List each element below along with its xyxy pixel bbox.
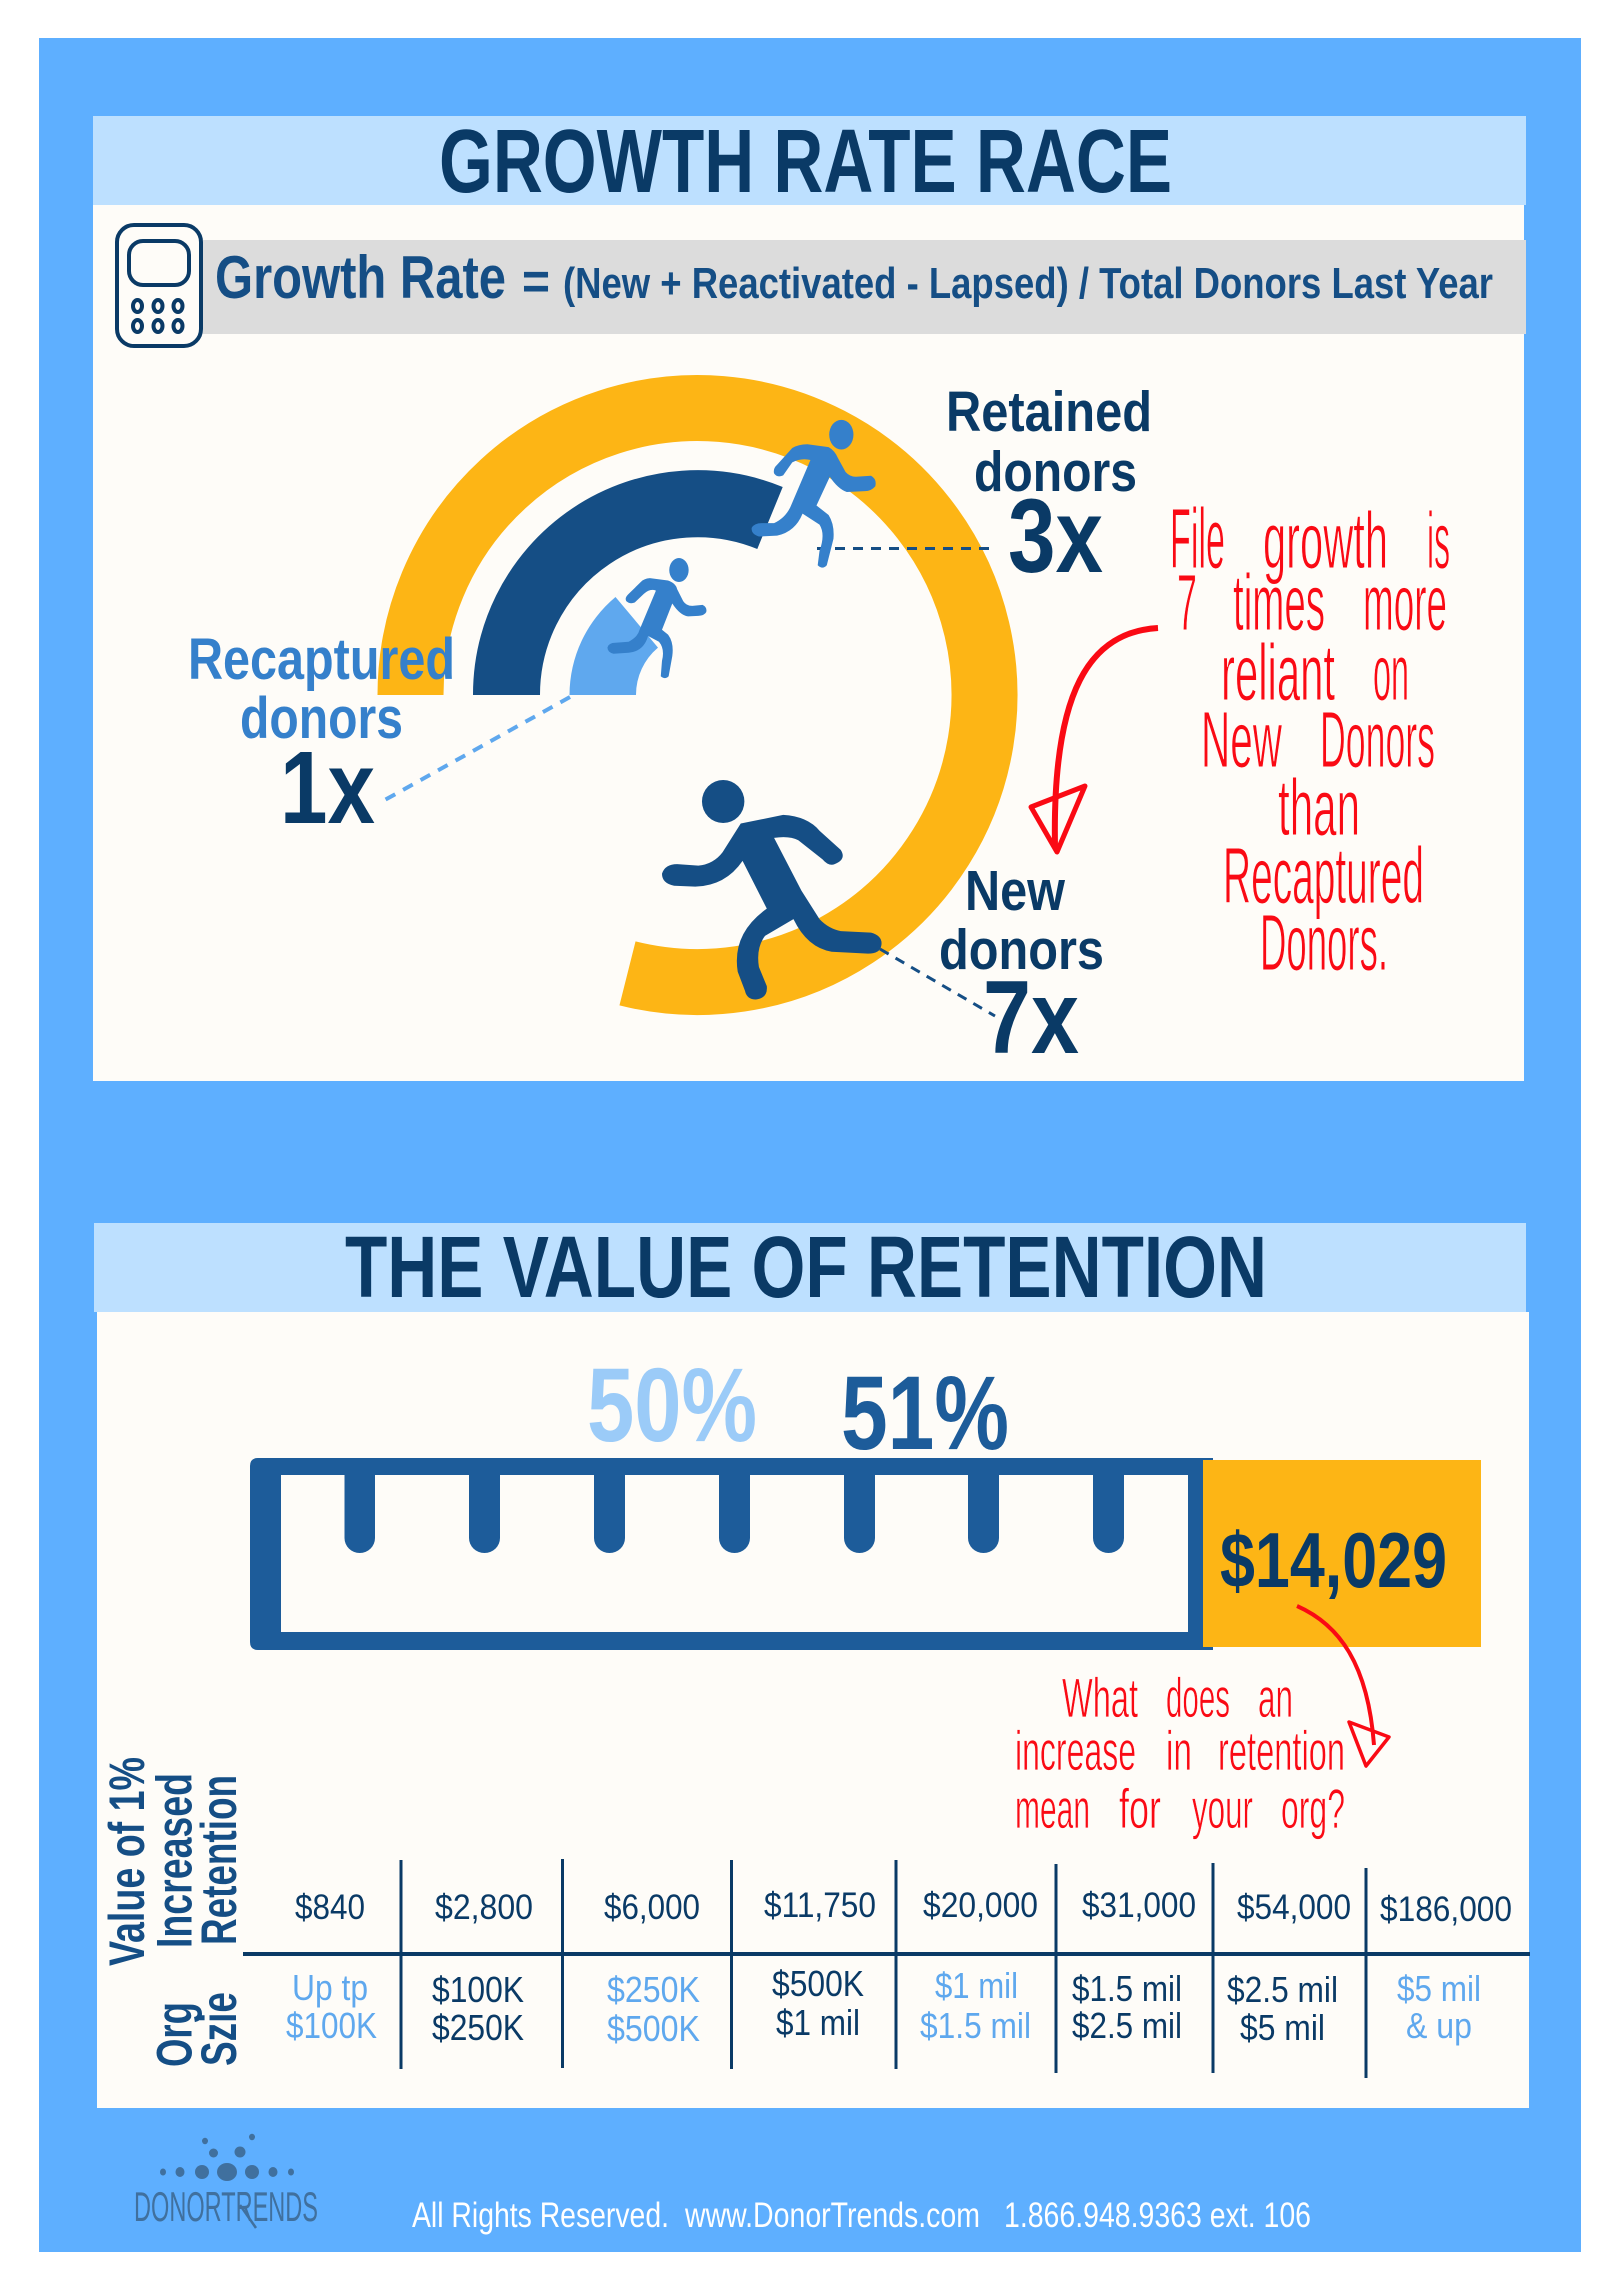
equals sign: = bbox=[522, 253, 550, 311]
table row: org size: Up tp bbox=[292, 1967, 368, 2008]
dashed line: new bbox=[880, 949, 995, 1016]
callout: handwritten note: growth bbox=[1263, 496, 1388, 585]
table row: org size: $1 mil bbox=[776, 2002, 860, 2043]
table row: value of 1 percent bbox=[295, 1886, 1512, 1929]
arrow: red to new donors bbox=[1031, 628, 1158, 852]
callout: handwritten question: retention bbox=[1218, 1719, 1345, 1782]
label: retained donors: donors bbox=[974, 440, 1137, 504]
callout: handwritten question: What bbox=[1062, 1666, 1138, 1729]
table row: value of 1 percent: $186,000 bbox=[1380, 1890, 1512, 1929]
footer text: All Rights Reserved. bbox=[412, 2196, 669, 2235]
panel: growth rate race: is bbox=[1427, 496, 1450, 585]
callout: handwritten question: mean bbox=[1015, 1777, 1090, 1840]
dashed line: retained bbox=[817, 547, 994, 550]
title: GROWTH RATE RACE bbox=[439, 112, 1172, 212]
callout: handwritten note: Donors. bbox=[1260, 898, 1388, 987]
callout: handwritten question: an bbox=[1258, 1666, 1293, 1729]
footer text bbox=[412, 2196, 1311, 2235]
axis label: value of 1% increased retention bbox=[99, 1757, 247, 1966]
chart: ruler gauge bbox=[250, 1458, 1213, 1650]
callout: handwritten question: your bbox=[1192, 1777, 1253, 1840]
footer text: 1.866.948.9363 ext. 106 bbox=[1004, 2196, 1311, 2235]
table row: org size: $500K bbox=[772, 1963, 864, 2004]
table row: org size: $2.5 mil bbox=[1227, 1969, 1338, 2010]
table row: org size: $250K bbox=[607, 1969, 700, 2010]
panel: growth rate race: more bbox=[1363, 558, 1447, 647]
number: value box amount: $14,029 bbox=[1220, 1516, 1447, 1604]
number: 7x: 7x bbox=[983, 960, 1079, 1076]
table row: org size: $5 mil bbox=[1397, 1968, 1481, 2009]
table row: org size: $1.5 mil bbox=[1072, 1968, 1182, 2009]
label: recaptured donors: Recaptured bbox=[188, 627, 455, 692]
axis label: org size: Org bbox=[146, 2002, 202, 2067]
dashed line: recaptured bbox=[383, 697, 570, 801]
table row: value of 1 percent: $20,000 bbox=[923, 1886, 1038, 1925]
callout: handwritten note: Donors bbox=[1320, 695, 1435, 784]
panel background bbox=[93, 205, 1524, 1081]
label: new donors: donors bbox=[939, 918, 1104, 982]
callout: handwritten question: org? bbox=[1281, 1777, 1345, 1840]
table row: org size bbox=[286, 1963, 1481, 2049]
callout: handwritten note: 7 bbox=[1177, 558, 1197, 647]
icon: runner new bbox=[662, 780, 882, 1000]
table row: value of 1 percent: $31,000 bbox=[1082, 1886, 1196, 1925]
table row: org size: $1 mil bbox=[935, 1965, 1018, 2006]
callout: handwritten note: times bbox=[1233, 558, 1325, 647]
title: THE VALUE OF RETENTION bbox=[345, 1219, 1267, 1316]
table row: value of 1 percent: $2,800 bbox=[435, 1888, 533, 1927]
callout: handwritten question: for bbox=[1119, 1777, 1161, 1840]
callout: handwritten note bbox=[1170, 492, 1450, 987]
callout: handwritten note: on bbox=[1373, 628, 1409, 717]
panel: growth rate race bbox=[93, 112, 1526, 1081]
callout: handwritten note: reliant bbox=[1221, 628, 1335, 717]
icon: calculator bbox=[117, 225, 201, 346]
callout: handwritten note: than bbox=[1278, 763, 1360, 852]
callout: handwritten question bbox=[1015, 1666, 1345, 1840]
table row: org size: $500K bbox=[607, 2008, 700, 2049]
heading band bbox=[93, 116, 1526, 205]
callout: handwritten question: increase bbox=[1015, 1719, 1136, 1782]
label: retained donors bbox=[946, 380, 1152, 504]
number: 50%: 50% bbox=[587, 1347, 757, 1464]
label: recaptured donors bbox=[188, 627, 455, 751]
logo: donortrends bbox=[134, 2134, 318, 2230]
chart: gold arc new donors bbox=[410, 408, 984, 982]
callout: handwritten note: New bbox=[1201, 695, 1282, 784]
table row: org size: $100K bbox=[432, 1969, 524, 2010]
axis label: org size: Szie bbox=[191, 1992, 247, 2066]
footer text: www.DonorTrends.com bbox=[684, 2196, 980, 2235]
callout: handwritten question: does bbox=[1166, 1666, 1230, 1729]
callout: handwritten note: File bbox=[1170, 492, 1225, 587]
number: 1x: 1x bbox=[280, 730, 375, 845]
chart: navy arc retained donors bbox=[506, 504, 770, 695]
axis label: value of 1% increased retention: Retention bbox=[191, 1775, 247, 1945]
table row: value of 1 percent: $11,750 bbox=[764, 1886, 876, 1925]
axis label: value of 1% increased retention: Increased bbox=[146, 1773, 202, 1948]
label: new donors bbox=[939, 859, 1104, 982]
axis label: org size bbox=[146, 1992, 247, 2067]
table row: value of 1 percent: $54,000 bbox=[1237, 1888, 1351, 1927]
table row: org size: $1.5 mil bbox=[920, 2005, 1031, 2046]
number: 3x: 3x bbox=[1008, 478, 1103, 595]
icon: runner recaptured bbox=[607, 558, 706, 678]
table row: value of 1 percent: $840 bbox=[295, 1888, 365, 1927]
table row: org size: $250K bbox=[432, 2007, 524, 2048]
chart: light arc recaptured donors bbox=[570, 597, 658, 695]
table rules bbox=[243, 1859, 1530, 2078]
callout: handwritten question: in bbox=[1166, 1719, 1192, 1782]
axis label: value of 1% increased retention: Value of 1% bbox=[99, 1757, 155, 1966]
table row: value of 1 percent: $6,000 bbox=[604, 1888, 700, 1927]
arrow: red to table bbox=[1297, 1606, 1389, 1766]
table row: org size: $100K bbox=[286, 2005, 377, 2046]
table row: org size: & up bbox=[1406, 2005, 1472, 2046]
label: new donors: New bbox=[965, 859, 1066, 923]
icon: runner retained bbox=[752, 420, 876, 568]
value box bbox=[1203, 1460, 1481, 1647]
heading band bbox=[94, 1223, 1526, 1312]
label: recaptured donors: donors bbox=[240, 686, 403, 751]
formula label: Growth Rate bbox=[215, 244, 506, 311]
number: 51%: 51% bbox=[841, 1355, 1009, 1472]
panel background bbox=[97, 1312, 1529, 2108]
table row: org size: $2.5 mil bbox=[1072, 2005, 1182, 2046]
panel: value of retention bbox=[94, 1219, 1530, 2108]
formula band bbox=[203, 240, 1526, 334]
table row: org size: $5 mil bbox=[1240, 2007, 1325, 2048]
label: retained donors: Retained bbox=[946, 380, 1152, 444]
logo: donortrends: DONORTRENDS bbox=[134, 2183, 318, 2230]
